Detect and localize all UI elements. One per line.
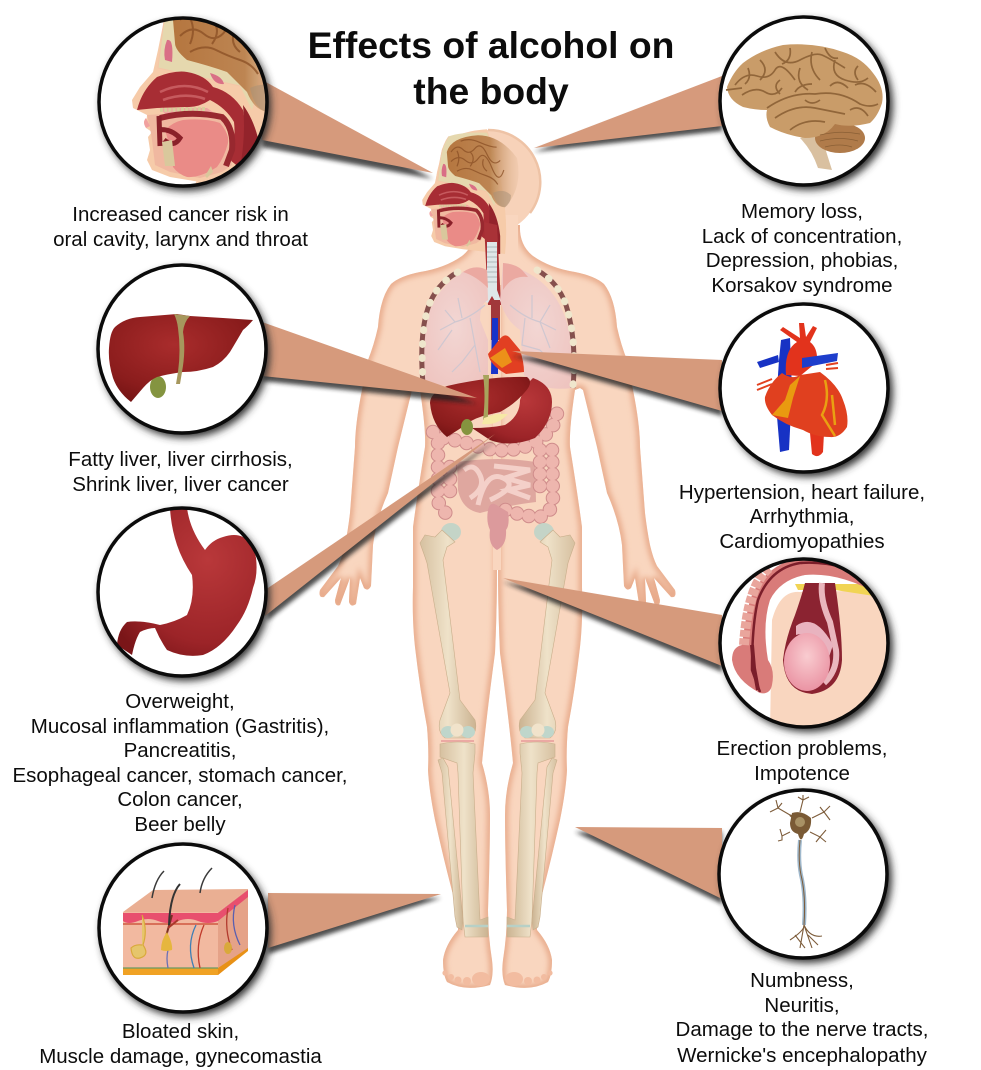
large intestine [433, 412, 557, 517]
text: brain: Lack of concentration, [702, 225, 902, 248]
small intestine [457, 459, 536, 513]
icon: gallbladder [150, 376, 166, 398]
wedge: reproductive [503, 578, 722, 666]
text: reproductive: Erection problems, [717, 737, 887, 760]
wedge: stomach [265, 434, 495, 616]
text: brain: Depression, phobias, [706, 249, 898, 272]
title: Effects of alcohol on [308, 24, 674, 66]
toes [442, 970, 553, 986]
icon: cerebellum [815, 123, 865, 153]
text: skin: Bloated skin, [122, 1020, 239, 1043]
wedge: neuron [575, 827, 722, 899]
icon: liver [109, 314, 253, 402]
panel: neuron circle [718, 789, 892, 963]
panel: brain circle [719, 16, 893, 190]
text: stomach: Colon cancer, [117, 788, 243, 811]
icon: aorta and pulmonary vessels [810, 433, 824, 456]
title: the body [413, 70, 569, 112]
wedge: oral cavity [262, 80, 433, 173]
text: skin: Muscle damage, gynecomastia [39, 1045, 322, 1068]
text: heart: Cardiomyopathies [719, 530, 885, 553]
panel: skin circle [98, 843, 271, 1017]
skin [770, 590, 890, 730]
panel: heart circle [719, 303, 893, 477]
yellow fat [795, 584, 874, 596]
panel: reproductive circle [719, 556, 893, 732]
head cross-section [422, 129, 518, 254]
ligament [174, 314, 190, 384]
text: stomach: Esophageal cancer, stomach cancer, [12, 764, 348, 787]
text: neuron: Neuritis, [764, 994, 840, 1017]
panel: liver circle [97, 264, 270, 438]
text: heart: Arrhythmia, [750, 505, 854, 528]
text: heart: Hypertension, heart failure, [679, 481, 925, 504]
text: neuron: Damage to the nerve tracts, [676, 1018, 928, 1041]
wedge: heart [512, 351, 722, 411]
icon: vena cava [776, 338, 792, 452]
text: stomach: Overweight, [125, 690, 235, 713]
wedge: skin [268, 893, 441, 948]
trachea and esophagus [483, 222, 501, 340]
text: brain: Korsakov syndrome [711, 274, 893, 297]
icon: brain stem [800, 132, 832, 170]
text: reproductive: Impotence [754, 762, 850, 785]
icon: heart [765, 372, 848, 437]
figure: human body with organs [320, 129, 676, 988]
icon: neuron [770, 795, 830, 948]
text: neuron: Numbness, [750, 969, 854, 992]
icon: stomach [117, 508, 257, 656]
heart [488, 318, 524, 374]
text: liver: Fatty liver, liver cirrhosis, [68, 448, 293, 471]
text: oral cavity: Increased cancer risk in [72, 203, 289, 226]
callout wedges [262, 76, 722, 954]
panel: oral cavity circle [94, 14, 278, 198]
wedge: liver [262, 322, 477, 398]
text: stomach: Pancreatitis, [124, 739, 236, 762]
text: stomach: Beer belly [134, 813, 226, 836]
text: neuron: Wernicke's encephalopathy [677, 1044, 928, 1067]
body silhouette [320, 130, 676, 988]
penis section [732, 560, 864, 694]
text: liver: Shrink liver, liver cancer [72, 473, 289, 496]
text: stomach: Mucosal inflammation (Gastritis), [31, 715, 329, 738]
leg bones, left side [420, 523, 488, 937]
text: brain: Memory loss, [741, 200, 863, 223]
leg bones, right side [507, 523, 575, 937]
rectum [487, 504, 509, 550]
scrotum [783, 583, 842, 694]
stomach in body [472, 378, 552, 444]
icon: cerebrum [727, 44, 883, 138]
lungs [422, 263, 574, 389]
icon: skin block [123, 868, 248, 975]
wedge shadows [262, 81, 722, 954]
panel: stomach circle [97, 507, 270, 681]
testis [784, 633, 830, 691]
wedge: brain [534, 76, 722, 148]
liver in body [430, 375, 530, 437]
text: oral cavity: oral cavity, larynx and throat [53, 228, 308, 251]
